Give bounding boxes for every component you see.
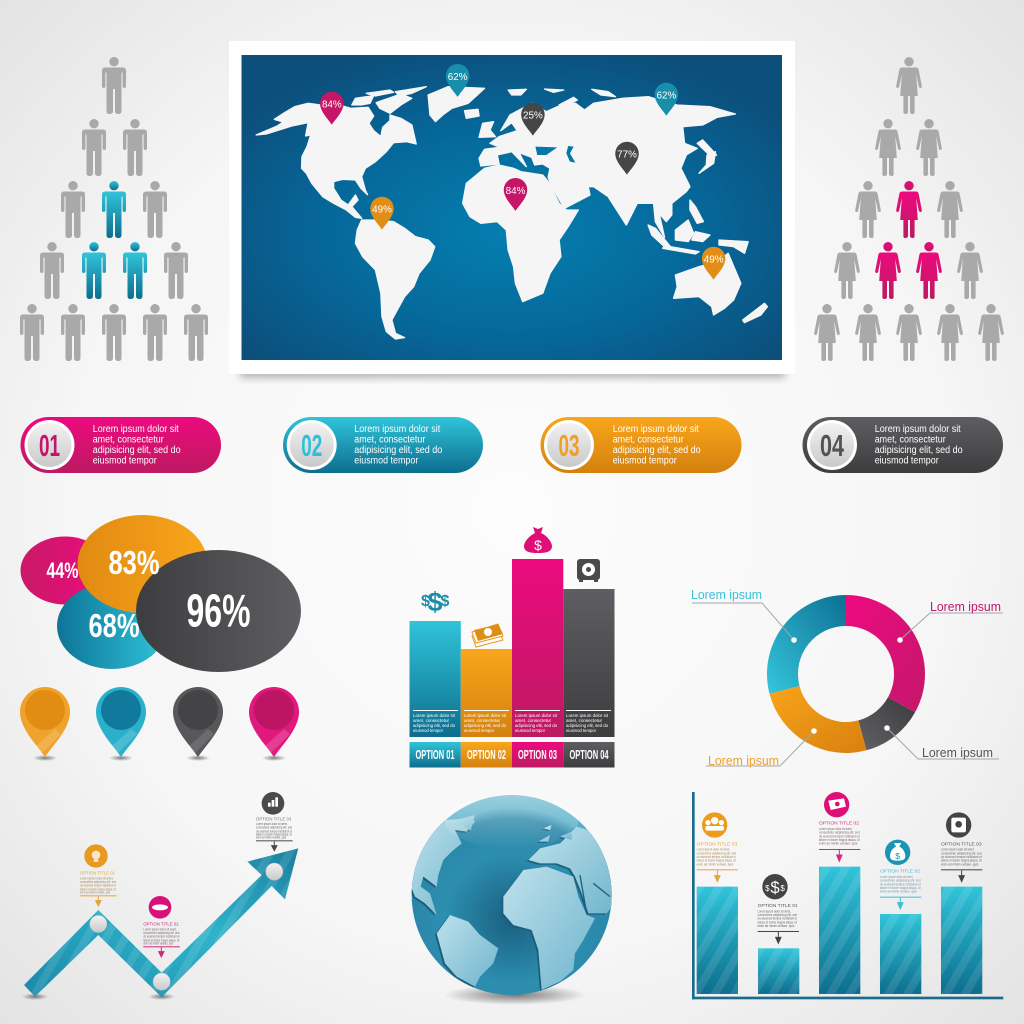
callout: option 01: do eiusmod tempor incididunt ut xyxy=(80,884,116,888)
callout: money bag: labore et dolore magna aliqua. Ut xyxy=(880,886,921,890)
callout: banknotes: consectetur adipisicing elit, sed xyxy=(819,831,860,835)
callout: banknotes xyxy=(819,792,860,861)
bar chart with options xyxy=(410,527,614,768)
bar chart with options: eiusmod tempor xyxy=(464,728,494,733)
callout: dollars xyxy=(758,874,799,943)
callout: option 02: do eiusmod tempor incididunt ut xyxy=(143,935,179,939)
callout: dollars: $ xyxy=(765,884,770,893)
map pin 77%: 77% xyxy=(617,150,637,161)
pill 01: amet, consectetur xyxy=(93,434,164,446)
callout: people: OPTION TITLE 03 xyxy=(697,841,738,846)
callout: option 03: labore et dolore magna aliqua. Ut xyxy=(256,833,292,837)
callout: dollars: do eiusmod tempor incididunt ut xyxy=(758,917,797,921)
callout: people: consectetur adipisicing elit, sed xyxy=(697,851,736,855)
callout: money bag: Lorem ipsum dolor sit amet, xyxy=(880,875,913,879)
pill 02: Lorem ipsum dolor sit xyxy=(354,424,440,435)
pin magenta xyxy=(249,687,299,761)
callout: money bag: OPTION TITLE 02 xyxy=(880,869,920,874)
bar chart with options: OPTION 04 xyxy=(570,747,609,762)
bar chart with options: Lorem ipsum dolor sit xyxy=(464,713,507,718)
bar chart with options: Lorem ipsum dolor sit xyxy=(413,713,456,718)
lower bar chart xyxy=(692,792,1003,999)
bar chart with options: Lorem ipsum dolor sit xyxy=(515,713,558,718)
map pin 25%: 25% xyxy=(523,111,543,122)
panel: world map xyxy=(229,41,795,378)
bar chart with options: eiusmod tempor xyxy=(566,728,596,733)
pill 04: amet, consectetur xyxy=(875,434,946,446)
pill 02: 02 xyxy=(301,428,322,463)
callout: dollars: OPTION TITLE 01 xyxy=(758,903,798,908)
bar chart with options: Lorem ipsum dolor sit xyxy=(566,713,609,718)
callout: safe: OPTION TITLE 03 xyxy=(941,841,982,846)
bar chart with options: OPTION 03 xyxy=(518,747,557,762)
pin teal xyxy=(96,687,146,761)
callout: option 01: Lorem ipsum dolor sit amet, xyxy=(80,876,113,880)
icon: safe xyxy=(577,559,600,582)
callout: people: Lorem ipsum dolor sit amet, xyxy=(697,848,730,852)
map pin 84%: 84% xyxy=(322,100,342,111)
donut chart: Lorem ipsum xyxy=(691,587,762,602)
callout: money bag: do eiusmod tempor incididunt ut xyxy=(880,882,921,886)
icon: dollar signs: $ xyxy=(421,593,430,610)
pill 04: 04 xyxy=(820,428,845,463)
callout: option 02: labore et dolore magna aliqua. Ut xyxy=(143,938,179,942)
pill 03: eiusmod tempor xyxy=(613,456,677,466)
callout: dollars: labore et dolore magna aliqua. Ut xyxy=(758,920,797,924)
callout: money bag: $ xyxy=(895,851,900,861)
overlapping percentage bubbles: 44% xyxy=(46,558,78,583)
callout: dollars: Lorem ipsum dolor sit amet, xyxy=(758,909,791,913)
bar chart with options: amet, consectetur xyxy=(413,718,449,723)
callout: dollars: enim ad minim veniam, quis xyxy=(758,924,794,928)
callout: banknotes: do eiusmod tempor incididunt ut xyxy=(819,834,860,838)
pill 02: eiusmod tempor xyxy=(354,456,419,466)
callout: option 03: do eiusmod tempor incididunt ut xyxy=(256,829,292,833)
callout: safe: enim ad minim veniam, quis xyxy=(941,862,978,866)
callout: people xyxy=(697,812,738,882)
icon: banknotes xyxy=(472,624,503,647)
donut chart: Lorem ipsum xyxy=(708,753,779,768)
callout: money bag: consectetur adipisicing elit, sed xyxy=(880,879,921,883)
callout: option 01: labore et dolore magna aliqua. Ut xyxy=(80,887,116,891)
pill 01: Lorem ipsum dolor sit xyxy=(93,424,179,435)
callout: people: labore et dolore magna aliqua. Ut xyxy=(697,859,736,863)
icon: dollar signs: $ xyxy=(441,593,450,610)
callout: banknotes: Lorem ipsum dolor sit amet, xyxy=(819,827,852,831)
globe xyxy=(407,795,620,1005)
callout: option 02 xyxy=(143,896,180,957)
zigzag growth arrow xyxy=(22,792,298,1000)
map pin 49%: 49% xyxy=(372,205,392,216)
pin orange xyxy=(20,687,70,761)
pill 04: Lorem ipsum dolor sit xyxy=(875,424,961,435)
donut chart: Lorem ipsum xyxy=(922,745,993,760)
pill 01: eiusmod tempor xyxy=(93,456,157,466)
callout: people: enim ad minim veniam, quis xyxy=(697,862,733,866)
map pin 49% Australia xyxy=(702,247,725,280)
map pin 62%: 62% xyxy=(448,72,468,83)
callout: option 01: consectetur adipisicing elit, sed xyxy=(80,880,116,884)
callout: money bag: enim ad minim veniam, quis xyxy=(880,890,917,894)
callout: option 01: OPTION TITLE 01 xyxy=(80,871,115,876)
bar chart with options: OPTION 01 xyxy=(416,747,454,762)
pill 04 xyxy=(802,417,1003,473)
icon: money bag xyxy=(524,527,552,553)
overlapping percentage bubbles: 96% xyxy=(186,584,250,636)
icon: dollar signs: $ xyxy=(427,587,443,617)
pyramid of men xyxy=(20,57,208,361)
map pin 49% xyxy=(370,197,394,230)
callout: dollars: $ xyxy=(780,884,785,893)
callout: dollars: $ xyxy=(770,878,780,897)
callout: option 03: OPTION TITLE 03 xyxy=(256,817,292,822)
callout: banknotes: enim ad minim veniam, quis xyxy=(819,842,857,846)
pill 03: 03 xyxy=(558,428,580,463)
map pin 84% xyxy=(320,92,344,125)
map pin 77% xyxy=(615,142,639,175)
callout: banknotes: labore et dolore magna aliqua. Ut xyxy=(819,838,860,842)
callout: option 03 xyxy=(256,792,293,851)
bar chart with options: amet, consectetur xyxy=(566,718,602,723)
pill 02: adipisicing elit, sed do xyxy=(354,445,443,456)
map pin 84% Africa: 84% xyxy=(506,186,526,197)
pill 01: adipisicing elit, sed do xyxy=(93,445,181,456)
donut chart: Lorem ipsum xyxy=(930,599,1001,614)
callout: safe xyxy=(941,812,982,882)
bar chart with options: adipisicing elit, sed do xyxy=(566,723,608,728)
callout: safe: do eiusmod tempor incididunt ut xyxy=(941,855,982,859)
pill 04: eiusmod tempor xyxy=(875,456,939,466)
pill 01 xyxy=(20,417,221,473)
callout: option 01 xyxy=(80,844,117,906)
map pin 62% east: 62% xyxy=(657,91,676,102)
bar chart with options: eiusmod tempor xyxy=(413,728,443,733)
map pin 49% Australia: 49% xyxy=(704,255,724,266)
callout: option 02: Lorem ipsum dolor sit amet, xyxy=(143,927,177,931)
callout: option 03: Lorem ipsum dolor sit amet, xyxy=(256,822,288,826)
icon: money bag: $ xyxy=(534,537,542,553)
bar chart with options: amet, consectetur xyxy=(464,718,500,723)
pin dark xyxy=(173,687,223,761)
callout: dollars: consectetur adipisicing elit, sed xyxy=(758,913,797,917)
callout: banknotes: OPTION TITLE 02 xyxy=(819,821,859,826)
callout: safe: Lorem ipsum dolor sit amet, xyxy=(941,848,974,852)
callout: option 02: enim ad minim veniam, quis xyxy=(143,942,173,946)
callout: option 01: enim ad minim veniam, quis xyxy=(80,891,110,895)
pill 04: adipisicing elit, sed do xyxy=(875,445,963,456)
bar chart with options: eiusmod tempor xyxy=(515,728,545,733)
callout: option 03: consectetur adipisicing elit, sed xyxy=(256,826,292,830)
icon: dollar signs xyxy=(421,587,450,617)
pill 03: Lorem ipsum dolor sit xyxy=(613,424,699,435)
overlapping percentage bubbles xyxy=(20,515,301,672)
pill 03: amet, consectetur xyxy=(613,434,684,446)
map pin 62% east xyxy=(655,83,678,116)
overlapping percentage bubbles: 68% xyxy=(88,607,140,644)
pill 01: 01 xyxy=(39,428,60,463)
pill 02: amet, consectetur xyxy=(354,434,426,446)
bar chart with options: adipisicing elit, sed do xyxy=(413,723,455,728)
pill 02 xyxy=(283,417,483,473)
donut chart xyxy=(691,587,1003,768)
callout: money bag xyxy=(880,840,921,909)
overlapping percentage bubbles: 83% xyxy=(108,544,160,581)
pill 03: adipisicing elit, sed do xyxy=(613,445,701,456)
pyramid of women xyxy=(814,57,1004,361)
continents xyxy=(256,87,767,339)
map pin 84% Africa xyxy=(504,178,527,211)
callout: safe: labore et dolore magna aliqua. Ut xyxy=(941,859,982,863)
callout: option 02: consectetur adipisicing elit, sed xyxy=(143,931,179,935)
map pin 25% xyxy=(521,103,545,136)
pill 03 xyxy=(540,417,742,473)
bar chart with options: adipisicing elit, sed do xyxy=(515,723,557,728)
bar chart with options: amet, consectetur xyxy=(515,718,551,723)
bar chart with options: adipisicing elit, sed do xyxy=(464,723,506,728)
callout: option 02: OPTION TITLE 02 xyxy=(143,922,179,927)
callout: people: do eiusmod tempor incididunt ut xyxy=(697,855,736,859)
callout: option 03: enim ad minim veniam, quis xyxy=(256,836,286,840)
map pin 62% xyxy=(446,64,469,97)
callout: safe: consectetur adipisicing elit, sed xyxy=(941,851,982,855)
bar chart with options: OPTION 02 xyxy=(467,747,506,762)
